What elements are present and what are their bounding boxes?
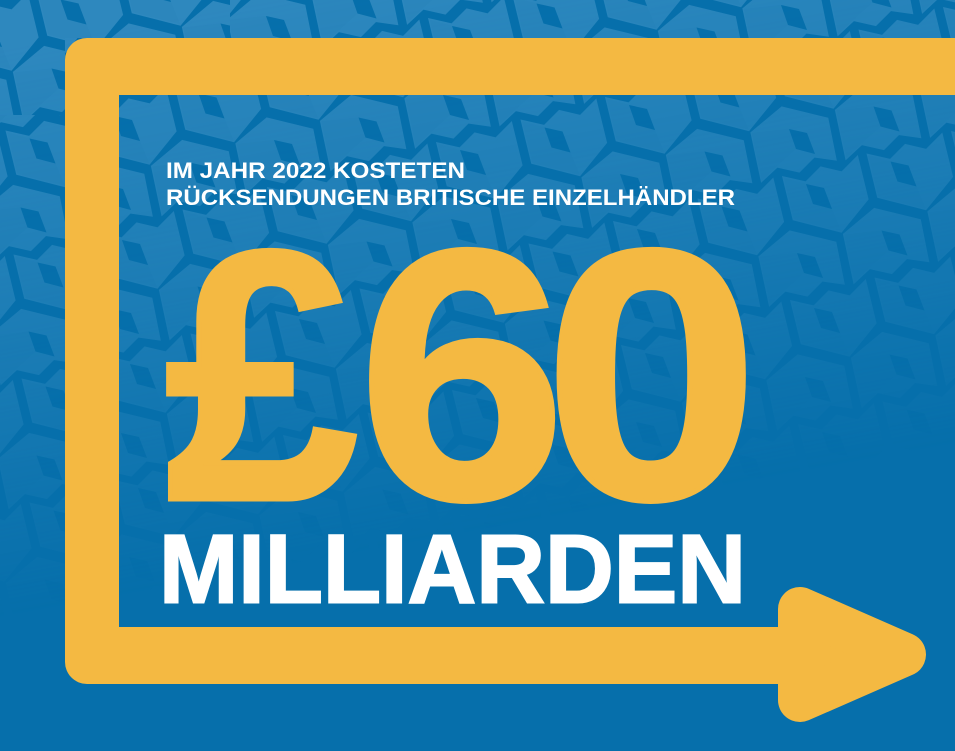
- intro text: IM JAHR 2022 KOSTETEN: [166, 158, 465, 183]
- arrow head: [800, 609, 904, 700]
- intro text: RÜCKSENDUNGEN BRITISCHE EINZELHÄNDLER: [166, 185, 735, 210]
- amount: £60: 6: [358, 177, 566, 574]
- background cube pattern: [0, 0, 955, 497]
- unit: MILLIARDEN: MILLIARDEN: [159, 514, 746, 624]
- amount: £60: 0: [544, 177, 759, 574]
- amount: £60: £: [165, 178, 358, 575]
- amount: £60: [165, 177, 759, 575]
